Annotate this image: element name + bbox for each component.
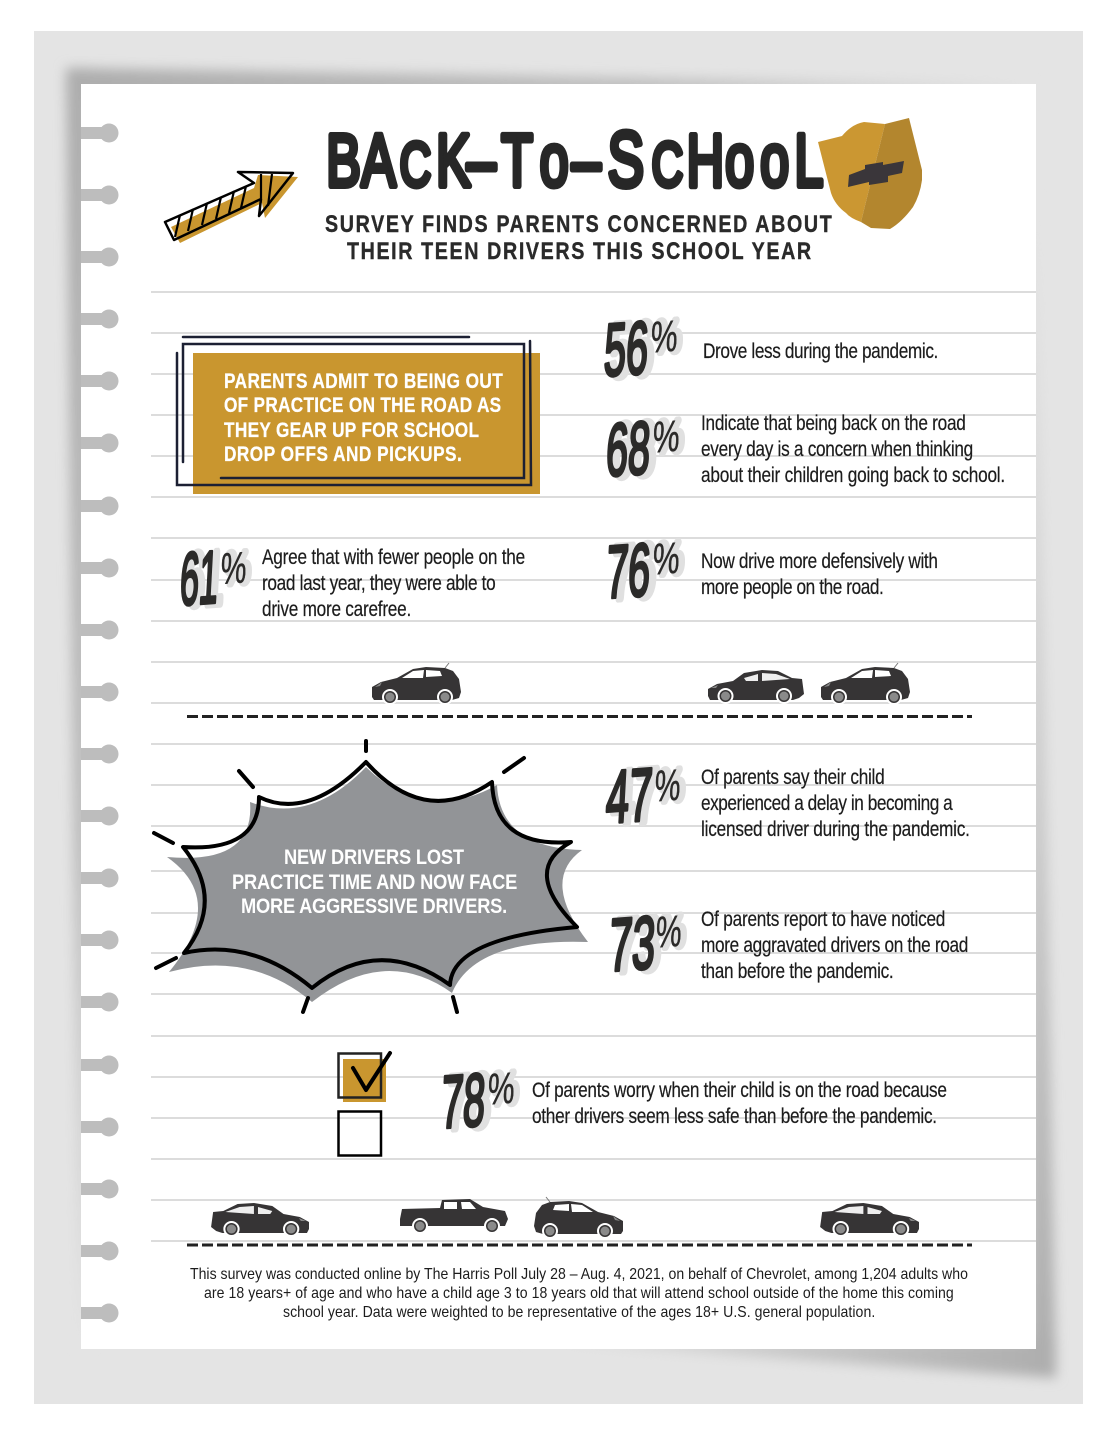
title: A bbox=[361, 119, 396, 202]
stat: 56%: 56 bbox=[608, 306, 656, 393]
car: pickup truck bbox=[400, 1199, 508, 1234]
stat: 73%: Of parents report to have noticed bbox=[701, 909, 945, 931]
stat: 61%: Agree that with fewer people on the bbox=[262, 547, 525, 569]
panel: parents out of practice: THEY GEAR UP FOR SCHOOL bbox=[224, 420, 479, 442]
panel: parents out of practice bbox=[177, 337, 540, 494]
stat: 68%: 68 bbox=[604, 406, 652, 492]
stat: 76%: more people on the road. bbox=[701, 577, 884, 599]
stat: 68%: 68 bbox=[610, 406, 658, 493]
callout: starburst: NEW DRIVERS LOST bbox=[284, 846, 464, 869]
footnote: school year. Data were weighted to be representative of the ages 18+ U.S. general population. bbox=[283, 1303, 875, 1321]
stat: 78%: 78 bbox=[439, 1058, 487, 1144]
stat: 76%: % bbox=[651, 534, 681, 585]
panel: parents out of practice: DROP OFFS AND PICKUPS. bbox=[224, 444, 462, 466]
title: – bbox=[467, 119, 496, 202]
subtitle bbox=[325, 210, 832, 264]
stat: 47%: licensed driver during the pandemic. bbox=[701, 819, 970, 841]
notebook spiral holes bbox=[81, 124, 118, 1322]
stat: 47% bbox=[604, 750, 970, 841]
title: C bbox=[400, 132, 431, 200]
stat: 61%: % bbox=[219, 543, 248, 594]
footnote: are 18 years+ of age and who have a child age 3 to 18 years old that will attend school outside of the home this coming bbox=[204, 1284, 954, 1302]
stat: 61%: % bbox=[223, 543, 252, 594]
stat: 47%: Of parents say their child bbox=[701, 767, 885, 789]
stat: 73%: than before the pandemic. bbox=[701, 961, 894, 983]
stat: 47%: experienced a delay in becoming a bbox=[701, 793, 953, 815]
stat: 61% bbox=[178, 533, 525, 622]
stat: 47%: 47 bbox=[610, 753, 660, 840]
car: suv right-facing bbox=[534, 1197, 623, 1239]
stat: 78% bbox=[439, 1055, 947, 1145]
title: o bbox=[725, 119, 754, 202]
title: B bbox=[326, 119, 361, 202]
stat: 68%: Indicate that being back on the road bbox=[701, 413, 966, 435]
road dashes bbox=[187, 715, 972, 718]
stat: 56%: 56 bbox=[602, 306, 650, 392]
stat: 73% bbox=[607, 899, 968, 988]
icon: arrow bbox=[165, 172, 298, 243]
icon: checkboxes bbox=[338, 1053, 390, 1156]
stat: 78%: % bbox=[486, 1064, 516, 1115]
road with cars, upper bbox=[187, 663, 972, 716]
panel: parents out of practice: PARENTS ADMIT TO BEING OUT bbox=[224, 371, 503, 393]
title: o bbox=[760, 119, 789, 202]
stat: 47%: % bbox=[657, 760, 686, 811]
car: suv bbox=[372, 663, 461, 705]
stat: 78%: Of parents worry when their child is on the road because bbox=[532, 1080, 947, 1102]
callout: starburst: MORE AGGRESSIVE DRIVERS. bbox=[241, 895, 507, 918]
title: L bbox=[794, 119, 823, 202]
title: K bbox=[436, 119, 471, 202]
stat: 56% bbox=[602, 303, 938, 393]
stat: 61%: road last year, they were able to bbox=[262, 573, 496, 595]
car: sedan right-facing second bbox=[820, 1203, 919, 1237]
stat: 68%: about their children going back to school. bbox=[701, 465, 1005, 487]
road with cars, lower bbox=[187, 1197, 972, 1245]
title: – bbox=[572, 119, 601, 202]
stat: 76%: Now drive more defensively with bbox=[701, 551, 938, 573]
road dashes lower bbox=[187, 1244, 972, 1246]
car: suv second bbox=[821, 663, 910, 705]
stat: 68% bbox=[604, 403, 1005, 493]
title: S bbox=[608, 116, 644, 203]
stat: 76%: 76 bbox=[604, 528, 652, 614]
title: T bbox=[501, 119, 533, 202]
title: o bbox=[540, 119, 569, 202]
stat: 73%: 73 bbox=[607, 901, 657, 987]
title: C bbox=[652, 132, 683, 200]
stat: 68%: % bbox=[655, 411, 685, 462]
stat: 47%: % bbox=[653, 761, 682, 812]
callout: starburst: PRACTICE TIME AND NOW FACE bbox=[232, 871, 517, 894]
stat: 76%: % bbox=[655, 533, 685, 584]
panel: parents out of practice: OF PRACTICE ON THE ROAD AS bbox=[224, 395, 501, 417]
stat: 68%: every day is a concern when thinking bbox=[701, 439, 973, 461]
subtitle: THEIR TEEN DRIVERS THIS SCHOOL YEAR bbox=[347, 237, 811, 264]
stat: 78%: % bbox=[490, 1063, 520, 1114]
stat: 73%: more aggravated drivers on the road bbox=[701, 935, 968, 957]
stat: 76% bbox=[604, 525, 938, 615]
stat: 73%: % bbox=[654, 907, 683, 958]
stat: 61%: 61 bbox=[184, 536, 226, 622]
stat: 61%: drive more carefree. bbox=[262, 599, 411, 621]
callout: starburst bbox=[154, 741, 588, 1012]
stat: 78%: other drivers seem less safe than before the pandemic. bbox=[532, 1106, 937, 1128]
subtitle: SURVEY FINDS PARENTS CONCERNED ABOUT bbox=[325, 210, 832, 237]
footnote bbox=[190, 1265, 968, 1321]
title: H bbox=[687, 119, 724, 202]
stat: 78%: 78 bbox=[445, 1058, 493, 1145]
stat: 76%: 76 bbox=[610, 528, 658, 615]
stat: 73%: 73 bbox=[613, 901, 663, 988]
stat: 68%: % bbox=[651, 412, 681, 463]
stat: 56%: % bbox=[649, 312, 679, 363]
icon: Chevrolet shield bbox=[818, 118, 922, 229]
stat: 47%: 47 bbox=[604, 753, 654, 839]
stat: 73%: % bbox=[658, 906, 687, 957]
footnote: This survey was conducted online by The Harris Poll July 28 – Aug. 4, 2021, on behalf of Chevrolet, among 1,204 adults who bbox=[190, 1265, 968, 1283]
stat: 56%: Drove less during the pandemic. bbox=[703, 341, 938, 363]
stat: 56%: % bbox=[653, 311, 683, 362]
stat: 61%: 61 bbox=[178, 535, 220, 621]
car: sedan right-facing bbox=[211, 1203, 309, 1237]
car: sedan bbox=[708, 670, 804, 704]
notebook paper bbox=[81, 84, 1036, 1349]
